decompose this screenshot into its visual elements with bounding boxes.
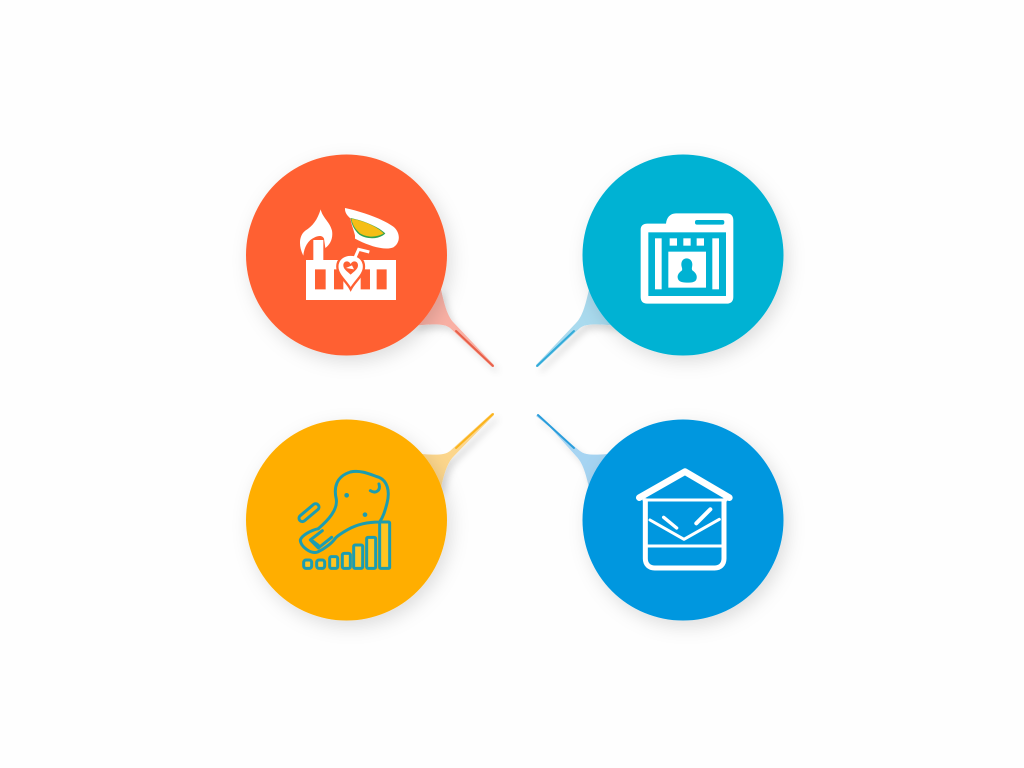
icon: drumstick and bars [298, 471, 390, 568]
orange tail [410, 285, 494, 367]
dash right [696, 509, 710, 523]
title slot [695, 220, 724, 225]
icon: house with envelope [639, 472, 729, 568]
yellow disc [246, 420, 447, 620]
pill [298, 502, 320, 523]
blue tail [536, 414, 620, 492]
icon: factory with flame and dish [300, 208, 399, 300]
flame [300, 209, 332, 256]
window frame [641, 213, 733, 304]
dash left [664, 517, 677, 528]
dish [345, 208, 399, 249]
yellow tail [410, 413, 494, 492]
house walls [645, 501, 724, 568]
teal disc [582, 154, 784, 356]
drumstick outline [318, 471, 388, 539]
orange disc [246, 154, 447, 356]
eave line [644, 495, 726, 504]
portrait card [668, 252, 706, 288]
rising bars [304, 560, 312, 568]
panel: yellow circle [246, 413, 494, 620]
floor line [647, 541, 723, 550]
heart pin [337, 255, 364, 289]
roof [639, 472, 729, 498]
panel: blue circle [536, 414, 784, 620]
straw [355, 249, 369, 258]
window pane [648, 232, 726, 296]
panel: orange circle [246, 154, 494, 367]
chimney [313, 240, 323, 261]
squares [670, 238, 677, 246]
side bars [655, 238, 662, 289]
grip [300, 529, 335, 552]
teal tail [536, 285, 620, 367]
icon: window with person [641, 213, 733, 304]
factory building [306, 260, 396, 300]
eyes [344, 493, 349, 498]
envelope fold [650, 519, 719, 539]
blue disc [582, 420, 784, 620]
person [678, 258, 697, 283]
panel: teal circle [536, 154, 784, 367]
